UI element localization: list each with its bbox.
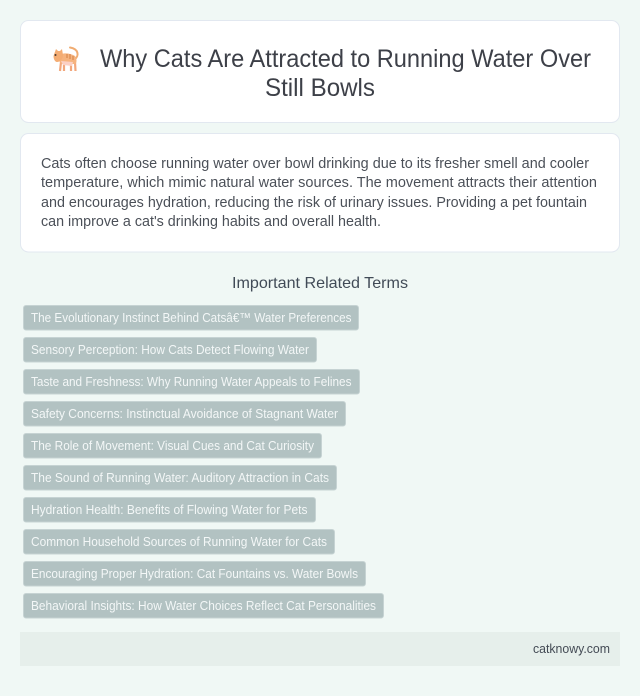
term 7: Hydration Health: Benefits of Flowing Water for Pets: [31, 502, 308, 517]
panel: description card: [20, 134, 620, 252]
term 1: [24, 306, 358, 330]
title: [100, 45, 591, 102]
term 6: [24, 466, 336, 490]
term 5: [24, 434, 322, 458]
text block: description: can improve a cat's drinking habits and overall health.: [41, 214, 381, 230]
text block: description: and encourages hydration, reducing the risk of urinary issues. Providing a pet fountain: [41, 195, 587, 211]
term 9: Encouraging Proper Hydration: Cat Fountains vs. Water Bowls: [31, 566, 358, 581]
title: Still Bowls: [265, 74, 375, 102]
heading: related terms: Important Related Terms: [232, 275, 408, 292]
term 4: Safety Concerns: Instinctual Avoidance of Stagnant Water: [31, 406, 339, 421]
footer text: source: catknowy.com: [533, 642, 610, 656]
text block: description: Cats often choose running water over bowl drinking due to its fresher smell and cooler: [41, 156, 589, 172]
term 3: Taste and Freshness: Why Running Water Appeals to Felines: [31, 374, 352, 389]
panel: title card: [20, 20, 620, 122]
term 2: [24, 338, 316, 362]
term 9: [24, 562, 366, 586]
term 5: The Role of Movement: Visual Cues and Cat Curiosity: [31, 438, 315, 453]
term 3: [24, 370, 360, 394]
term 10: Behavioral Insights: How Water Choices Reflect Cat Personalities: [31, 598, 376, 613]
term 8: [24, 530, 334, 554]
term 1: The Evolutionary Instinct Behind Catsâ€™ Water Preferences: [31, 310, 352, 325]
icon: cat: [54, 48, 78, 71]
term 2: Sensory Perception: How Cats Detect Flowing Water: [31, 342, 310, 357]
term 8: Common Household Sources of Running Water for Cats: [31, 534, 327, 549]
term 4: [24, 402, 346, 426]
footer: [20, 632, 620, 666]
term 10: [24, 594, 384, 618]
text block: description: [41, 156, 597, 230]
title: Why Cats Are Attracted to Running Water Over: [100, 45, 591, 73]
list: related terms: [24, 306, 384, 618]
term 7: [24, 498, 316, 522]
text block: description: temperature, which mimic natural water sources. The movement attracts their attention: [41, 175, 597, 191]
term 6: The Sound of Running Water: Auditory Attraction in Cats: [31, 470, 329, 485]
